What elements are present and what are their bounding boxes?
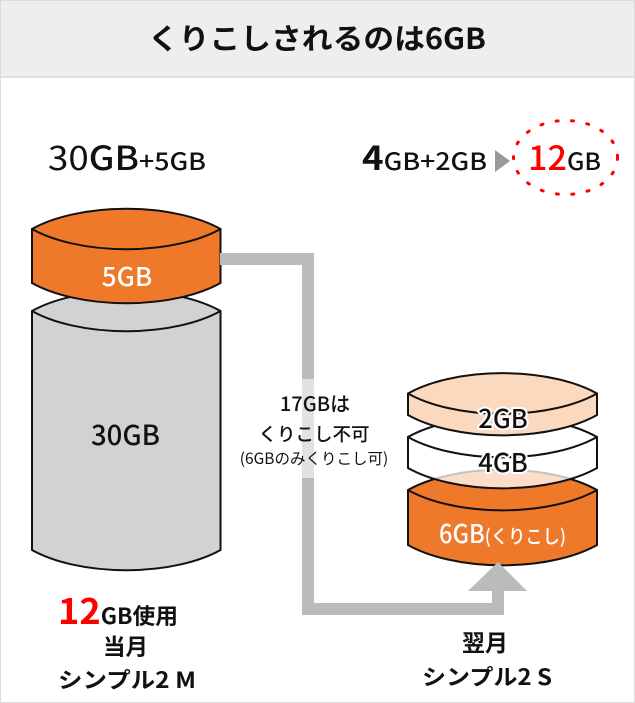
label: current month — [58, 584, 196, 695]
heading: title: くりこしされるのは6GB — [148, 16, 486, 58]
arrow: small grey triangle — [495, 150, 510, 172]
label: next month: シンプル2 S — [422, 660, 552, 692]
text: left total 30GB+5GB: 30GB+5GB — [48, 132, 206, 180]
cylinder: 6GB carried over: 6GB(くりこし) — [439, 514, 566, 551]
cylinder: 2GB peach: 2GB — [478, 399, 528, 436]
text: 17GB note: くりこし不可 — [258, 421, 370, 447]
label: next month — [422, 624, 552, 692]
cylinder: 30GB grey: 30GB — [91, 413, 160, 453]
text: 17GB note — [240, 388, 388, 469]
cylinder: 5GB orange: 5GB — [102, 257, 152, 294]
cylinder: 6GB carried over — [408, 470, 597, 565]
label: next month: 翌月 — [462, 624, 508, 658]
text: 17GB note: 17GBは — [280, 388, 350, 417]
panel: title header — [1, 1, 634, 78]
cylinder: 30GB grey — [32, 291, 220, 570]
arrow: transfer from 5GB to next month — [220, 253, 527, 615]
text: right total 4GB+2GB: 4GB+2GB — [362, 132, 487, 180]
cylinder: 4GB white: 4GB — [478, 443, 528, 480]
label: current month: シンプル2 M — [58, 663, 196, 695]
cylinder: 4GB white — [408, 417, 597, 488]
label: current month: 12GB使用 — [58, 584, 178, 635]
cylinder: 2GB peach — [408, 373, 597, 436]
text: 12GB result: 12GB — [528, 132, 601, 180]
text: 17GB note: (6GBのみくりこし可) — [240, 447, 388, 469]
label: current month: 当月 — [103, 630, 148, 662]
cylinder: 5GB orange — [32, 209, 220, 303]
callout: red dotted circle — [514, 120, 618, 194]
